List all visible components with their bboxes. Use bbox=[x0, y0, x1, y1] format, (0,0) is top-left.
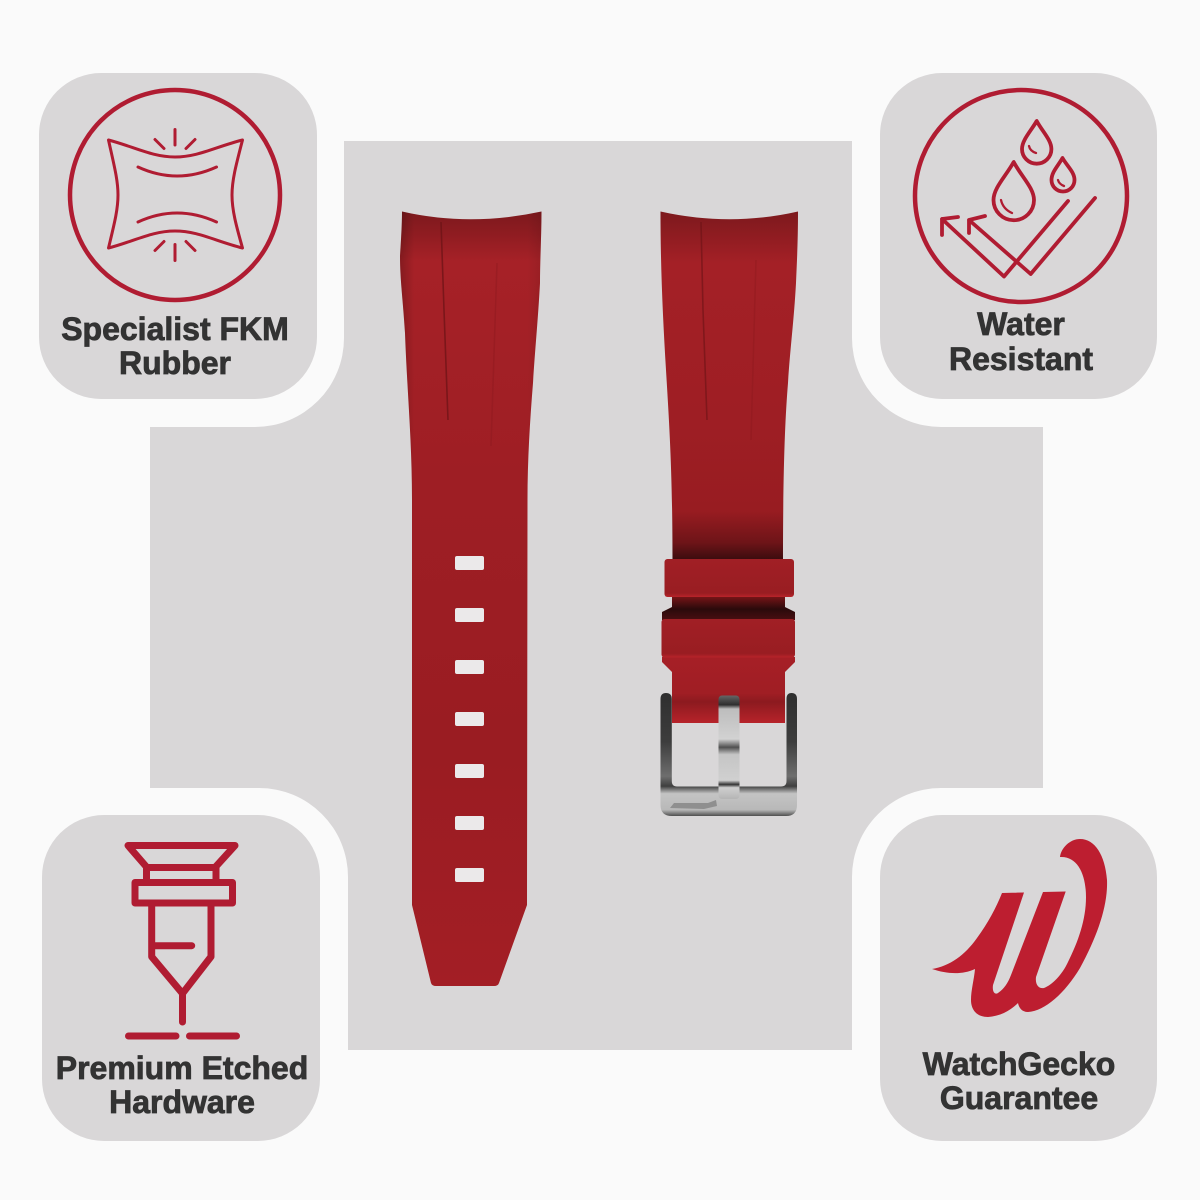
icon: etching tool bbox=[128, 846, 236, 1036]
background panel bbox=[150, 141, 1043, 1050]
buckle strap bbox=[660, 212, 798, 816]
label: Premium Etched Hardware: Premium Etched bbox=[56, 1050, 308, 1086]
label: Specialist FKM Rubber: Rubber bbox=[119, 345, 231, 381]
label: WatchGecko Guarantee: WatchGecko bbox=[923, 1046, 1115, 1082]
panel: Specialist FKM Rubber bbox=[39, 73, 317, 399]
icon: WatchGecko logo bbox=[932, 839, 1107, 1017]
label: WatchGecko Guarantee: Guarantee bbox=[940, 1080, 1098, 1116]
label: Water Resistant: Water bbox=[977, 306, 1065, 342]
panel: Water Resistant bbox=[880, 73, 1157, 399]
strap flare bbox=[662, 657, 795, 723]
label: Water Resistant: Resistant bbox=[949, 341, 1093, 377]
label: Premium Etched Hardware: Hardware bbox=[109, 1084, 255, 1120]
buckle engraving bbox=[670, 800, 717, 809]
strap holes bbox=[455, 556, 484, 882]
label: Specialist FKM Rubber: Specialist FKM bbox=[61, 311, 289, 347]
long strap bbox=[400, 212, 542, 986]
panel: Premium Etched Hardware bbox=[42, 815, 320, 1141]
icon: stretching rubber bbox=[70, 90, 280, 300]
buckle bbox=[660, 693, 797, 816]
buckle tongue bbox=[718, 696, 740, 799]
strap keepers bbox=[662, 559, 795, 658]
panel: WatchGecko Guarantee bbox=[880, 815, 1157, 1141]
icon: water drops and arrows bbox=[915, 90, 1127, 302]
strap gap bbox=[662, 596, 795, 620]
